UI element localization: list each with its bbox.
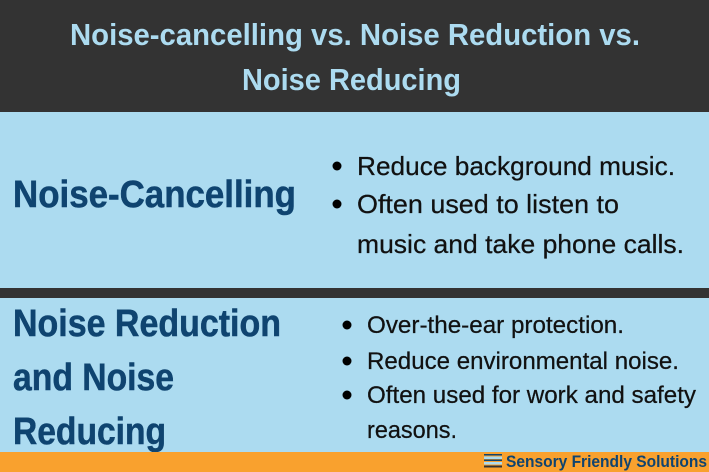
- bullet list: noise reduction: Over-the-ear protection.: [367, 312, 624, 339]
- bullet list: noise-cancelling: Reduce background music.: [357, 151, 675, 181]
- bullet list: noise-cancelling: [332, 151, 684, 259]
- panel: noise-cancelling: [0, 112, 709, 288]
- bullet list: noise-cancelling: music and take phone calls.: [357, 229, 684, 259]
- bullet list: noise reduction: [342, 312, 696, 444]
- heading: noise reduction and noise reducing: Reducing: [13, 411, 166, 453]
- icon: brand stripes: [484, 454, 502, 468]
- footer bar: [0, 452, 709, 472]
- panel: noise reduction and noise reducing: [0, 298, 709, 453]
- bullet list: noise reduction: Reduce environmental noise.: [367, 348, 679, 375]
- heading: noise reduction and noise reducing: Noise Reduction: [13, 303, 281, 345]
- heading: noise reduction and noise reducing: [13, 303, 281, 453]
- bullet list: noise-cancelling: Often used to listen to: [357, 189, 619, 219]
- bullet list: noise reduction: Often used for work and safety: [367, 382, 696, 409]
- title banner: Noise-cancelling vs. Noise Reduction vs.: [70, 17, 640, 52]
- divider band: [0, 288, 709, 298]
- title banner: Noise Reducing: [242, 62, 461, 97]
- heading: noise reduction and noise reducing: and Noise: [13, 357, 174, 399]
- title banner: [0, 0, 709, 112]
- bullet list: noise reduction: reasons.: [367, 417, 457, 444]
- heading: noise-cancelling: Noise-Cancelling: [13, 174, 296, 216]
